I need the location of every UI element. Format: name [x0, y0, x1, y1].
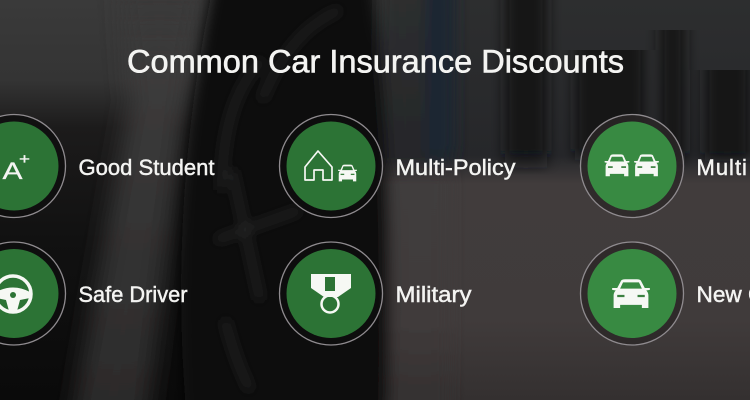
discount item: New Car [580, 242, 750, 345]
icon: steering wheel [0, 242, 66, 345]
discount item: Safe Driver [0, 242, 188, 345]
label: Multi-Policy: Multi-Policy [396, 155, 516, 180]
discount item: Good Student [0, 114, 214, 218]
discount item: Multi-Policy [280, 114, 516, 218]
icon: house and car [280, 114, 382, 218]
discount item: Military [280, 242, 472, 345]
icon: two cars [580, 114, 684, 218]
icon: medal [280, 242, 382, 345]
discount item: Multi-Car [580, 114, 750, 218]
label: Safe Driver: Safe Driver [78, 282, 188, 307]
title: Common Car Insurance Discounts [127, 44, 624, 80]
icon: grade A plus: A [2, 158, 22, 185]
label: Military: Military [396, 282, 472, 307]
icon: grade A plus [0, 114, 66, 218]
icon: grade A plus: + [19, 151, 30, 168]
label: Good Student: Good Student [78, 155, 214, 180]
icon: car [580, 242, 684, 345]
